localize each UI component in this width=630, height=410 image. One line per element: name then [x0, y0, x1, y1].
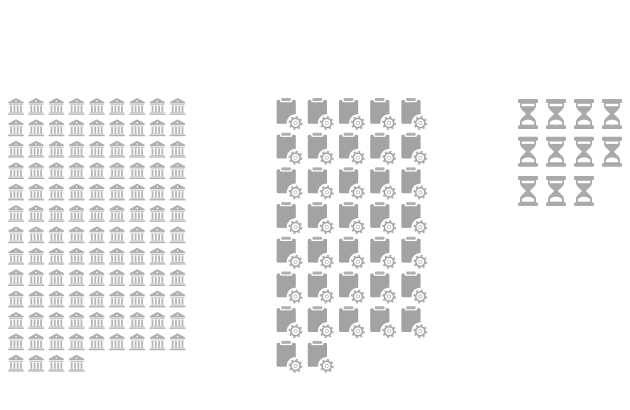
icon row: hourglasses 1: [518, 99, 622, 129]
icon row: banks 9: [8, 269, 186, 286]
icon row: banks 12: [8, 333, 186, 350]
icon row: clipboards 3: [277, 167, 429, 201]
icon row: hourglasses 3: [518, 176, 594, 206]
icon row: banks 13: [8, 355, 85, 372]
icon row: banks 6: [8, 205, 186, 222]
icon row: clipboards 5: [277, 236, 429, 271]
icon row: clipboards 4: [277, 201, 429, 236]
panel: hourglass icons: [518, 99, 622, 206]
icon row: clipboards 2: [277, 132, 429, 166]
icon row: banks 3: [8, 141, 186, 158]
icon row: banks 7: [8, 226, 186, 243]
icon row: banks 10: [8, 291, 186, 307]
icon row: banks 8: [8, 248, 186, 265]
icon row: clipboards 1: [277, 97, 429, 132]
panel: clipboard with gear icons: [277, 97, 429, 375]
icon row: banks 4: [8, 162, 186, 179]
icon row: banks 5: [8, 184, 186, 200]
icon row: clipboards 7: [277, 305, 429, 340]
icon row: banks 2: [8, 119, 186, 136]
icon row: clipboards 6: [277, 271, 429, 305]
panel: bank building icons: [8, 98, 186, 372]
icon row: banks 11: [8, 312, 186, 329]
icon row: hourglasses 2: [518, 137, 622, 167]
icon row: banks 1: [8, 98, 186, 115]
icon row: clipboards 8: [277, 340, 336, 375]
